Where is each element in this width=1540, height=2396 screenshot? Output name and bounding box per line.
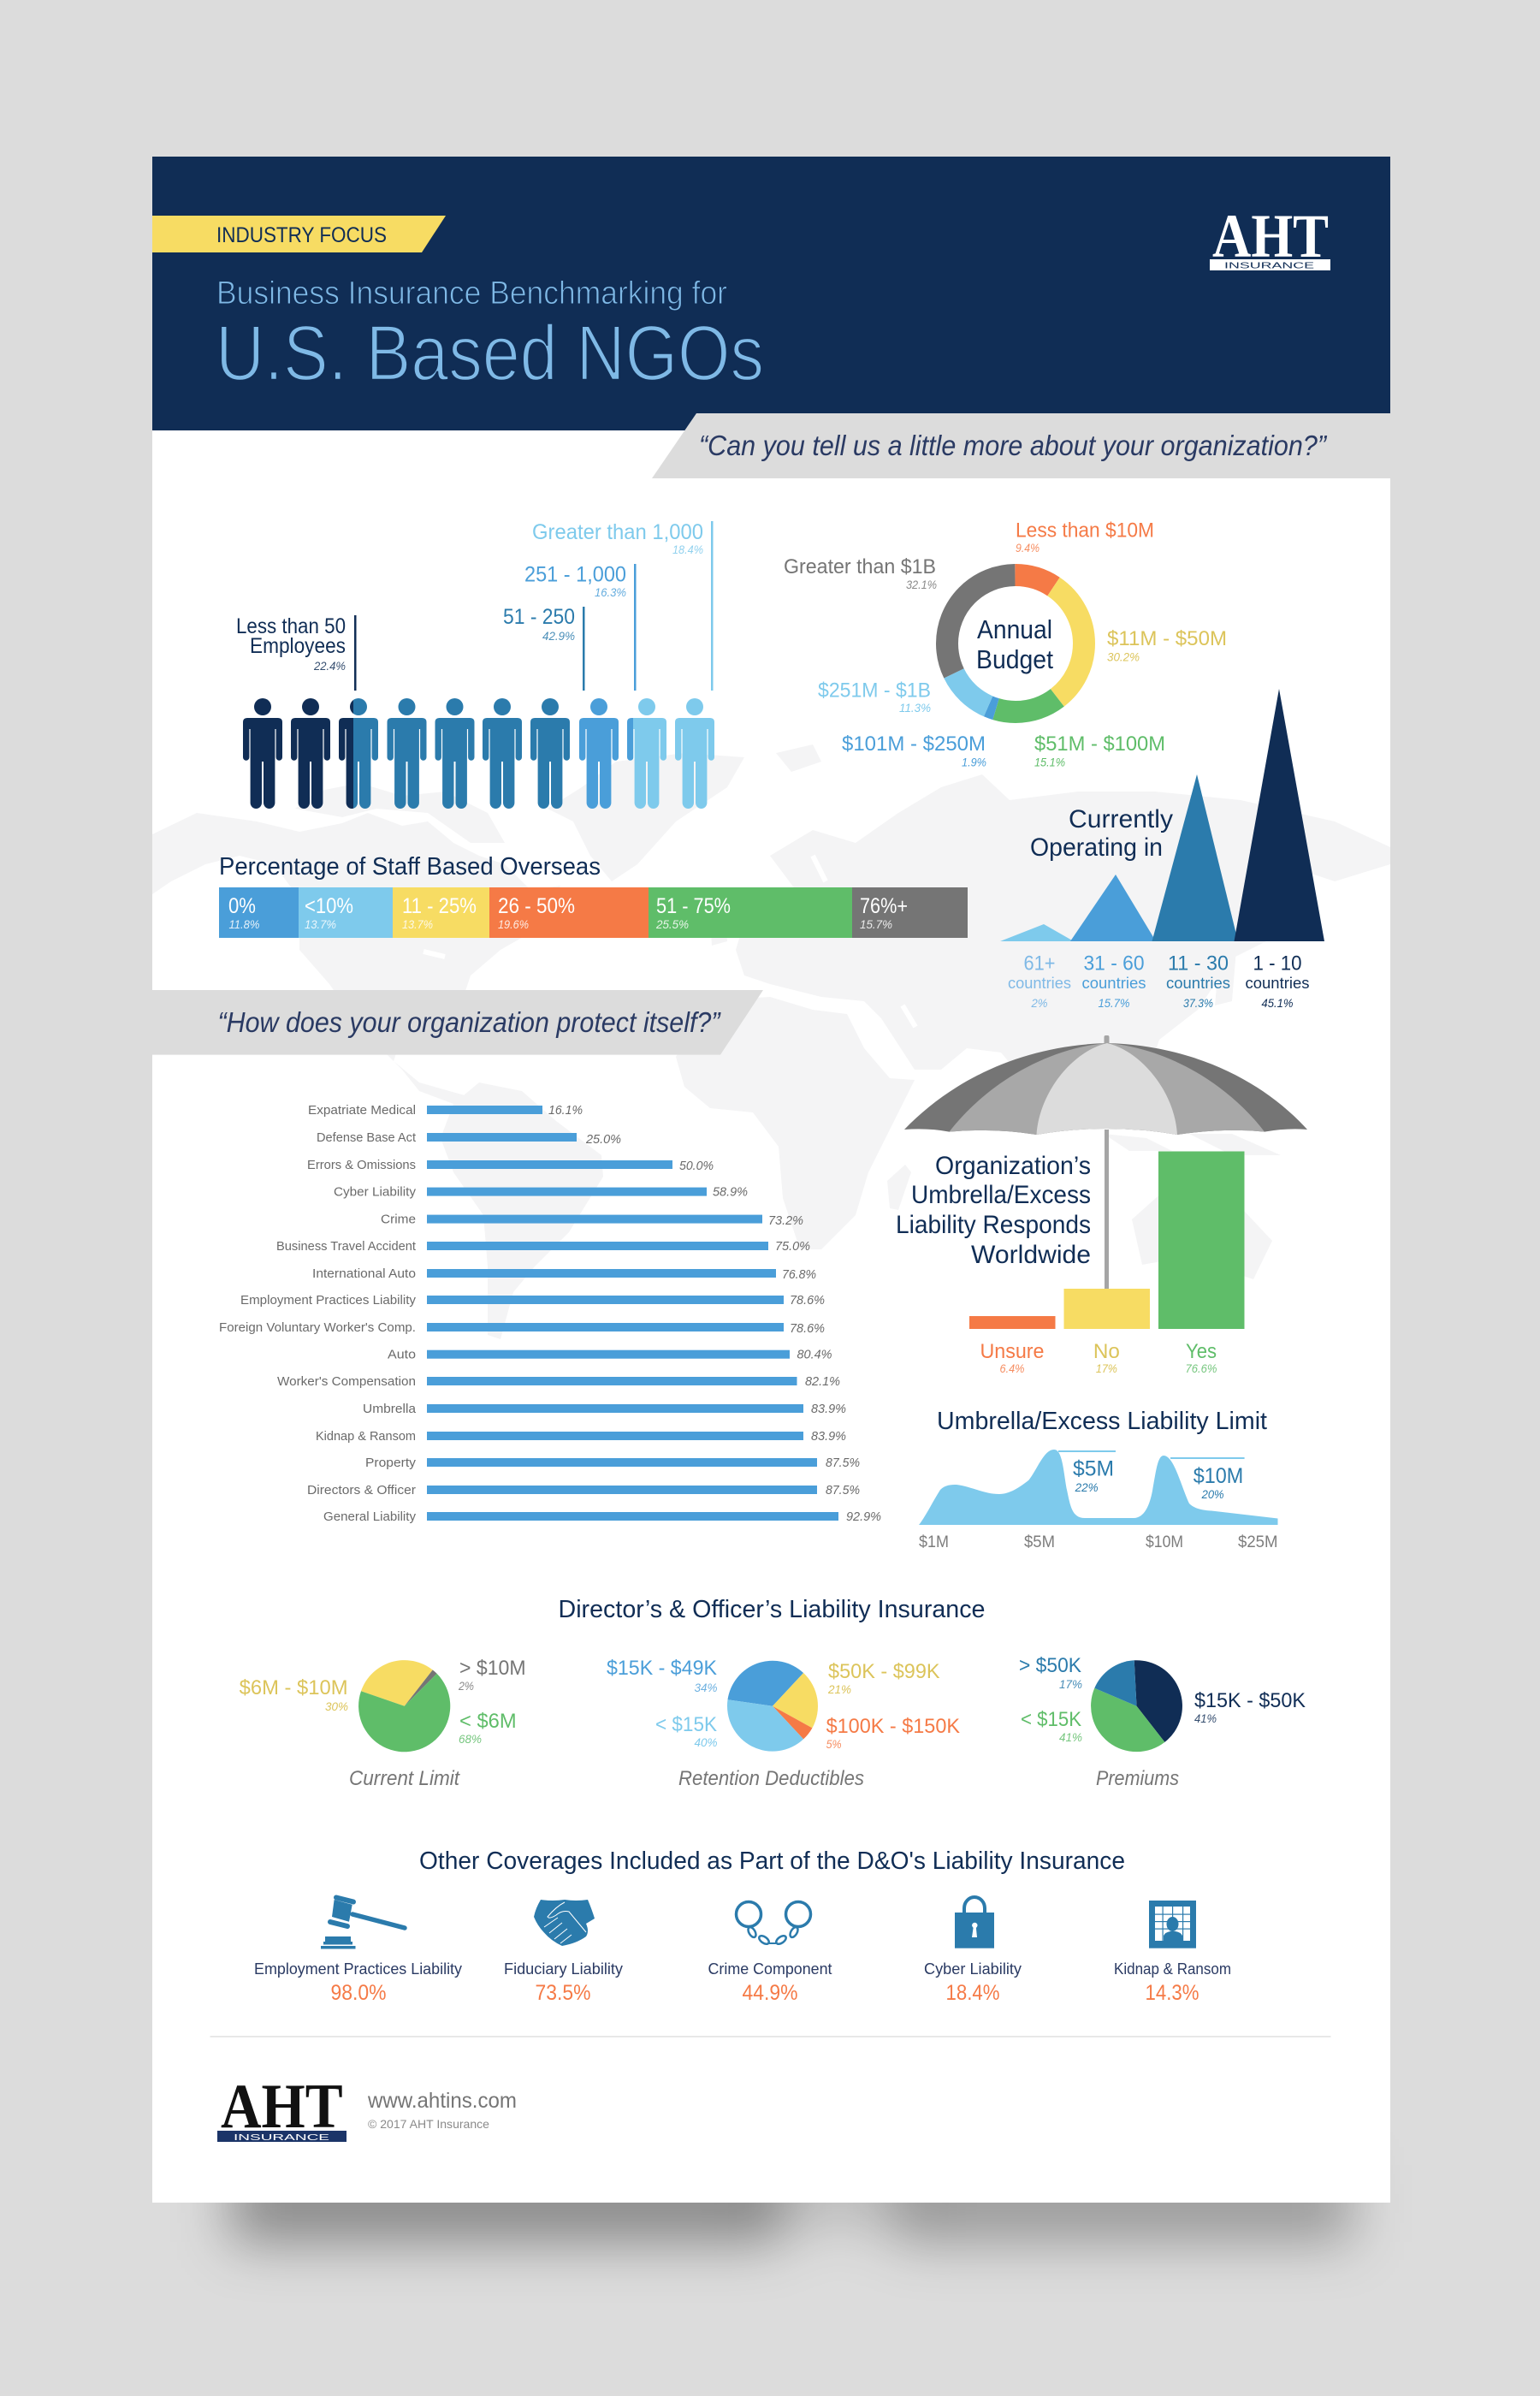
label: < $15K: < $15K: [1021, 1708, 1081, 1731]
logo: AHT footer: INSURANCE: [234, 2132, 329, 2143]
stacked bar: 15.7%: [860, 917, 892, 931]
label: yes: [1186, 1340, 1217, 1375]
label: 11-30 countries: 11 - 30: [1168, 952, 1229, 976]
icon: gavel: [321, 1898, 405, 1949]
caption: premiums: Premiums: [1096, 1767, 1179, 1790]
callout: $10M: 20%: [1201, 1488, 1224, 1501]
label: < $15K: < $15K: [655, 1713, 717, 1736]
label: employment practices liability: 98.0%: [330, 1981, 387, 2005]
label: greater than 1,000: [532, 520, 714, 691]
label: 61+ countries: 2%: [1031, 996, 1047, 1010]
label: 11-30 countries: [1166, 952, 1230, 1010]
panel: umbrella worldwide response: [896, 1035, 1307, 1375]
caption: current limit: Current Limit: [349, 1767, 460, 1790]
stacked bar: 13.7%: [305, 917, 336, 931]
label: $11M - $50M: $11M - $50M: [1107, 627, 1227, 650]
stacked bar: 26 - 50%: [498, 894, 575, 918]
stacked bar: 13.7%: [402, 917, 433, 931]
label: $51M - $100M: [1034, 732, 1165, 768]
label: crime component: 44.9%: [743, 1981, 797, 2005]
bar values: 78.6%: [790, 1322, 825, 1336]
header band: [152, 157, 1390, 430]
triangle chart: [1000, 689, 1324, 941]
label: 1-10 countries: countries: [1246, 975, 1309, 992]
area chart: [919, 1450, 1278, 1525]
label: 31-60 countries: [1081, 952, 1146, 1010]
label: < $15K: [1021, 1708, 1082, 1744]
bar labels: Cyber Liability: [334, 1186, 417, 1200]
pie: premiums: [1091, 1660, 1182, 1752]
label: 1-10 countries: 1 - 10: [1253, 952, 1302, 976]
label: $251M - $1B: [818, 679, 931, 715]
bar values: [548, 1104, 881, 1524]
bar labels: Umbrella: [363, 1403, 417, 1416]
bar labels: Auto: [388, 1349, 416, 1362]
bar values: 87.5%: [826, 1456, 860, 1470]
label: greater than 1,000: 18.4%: [672, 543, 703, 556]
label: $6M - $10M: [240, 1676, 348, 1713]
bar values: 76.8%: [782, 1268, 816, 1282]
bar labels: Foreign Voluntary Worker's Comp.: [219, 1321, 416, 1335]
label: greater than $1B: 32.1%: [906, 578, 937, 591]
label: greater than 1,000: Greater than 1,000: [532, 520, 703, 544]
bar values: 87.5%: [826, 1484, 860, 1498]
donut chart: [947, 575, 1084, 712]
heading: Organization’s: [935, 1152, 1091, 1180]
label: 11-30 countries: 37.3%: [1183, 996, 1213, 1010]
donut centre label: [976, 614, 1053, 674]
label: > $10M: [458, 1657, 526, 1693]
heading: [1030, 805, 1173, 862]
label: $15K - $49K: [607, 1657, 717, 1694]
bar labels: [219, 1104, 417, 1524]
panel: directors and officers liability insurance: [240, 1596, 1306, 1790]
industry focus tag: INDUSTRY FOCUS: [216, 223, 387, 247]
label: 1-10 countries: 45.1%: [1261, 996, 1294, 1010]
label: greater than $1B: Greater than $1B: [784, 555, 936, 578]
label: $6M - $10M: $6M - $10M: [240, 1676, 348, 1699]
bar labels: Worker's Compensation: [277, 1375, 416, 1389]
footer website: www.ahtins.com: [367, 2089, 517, 2113]
bar labels: Expatriate Medical: [308, 1104, 416, 1118]
label: fiduciary liability: [504, 1960, 623, 2005]
label: 31-60 countries: 15.7%: [1099, 996, 1129, 1010]
heading: Liability Responds: [896, 1211, 1091, 1239]
panel: umbrella excess liability limit: [919, 1408, 1278, 1551]
world map background: [152, 744, 1390, 1339]
logo: AHT footer: AHT: [221, 2072, 343, 2142]
label: > $10M: > $10M: [459, 1657, 526, 1680]
label: $100K - $150K: [826, 1715, 960, 1751]
label: employment practices liability: [254, 1960, 462, 2005]
label: < $15K: 41%: [1059, 1731, 1082, 1744]
label: $6M - $10M: 30%: [325, 1700, 348, 1713]
panel: employee count pictogram: [236, 520, 714, 809]
label: cyber liability: [924, 1960, 1022, 2005]
bar values: 50.0%: [679, 1159, 714, 1173]
panel: currently operating in: [1000, 689, 1324, 1010]
logo: AHT header: INSURANCE: [1224, 260, 1314, 270]
bar values: 73.2%: [768, 1214, 803, 1228]
bar labels: Directors & Officer: [307, 1484, 416, 1498]
axis labels: $25M: [1238, 1533, 1278, 1551]
label: no: [1093, 1340, 1120, 1375]
label: $51M - $100M: 15.1%: [1034, 755, 1065, 768]
stacked bar: 25.5%: [655, 917, 689, 931]
label: fiduciary liability: 73.5%: [536, 1981, 590, 2005]
donut centre label: Annual: [977, 614, 1052, 644]
label: no: No: [1093, 1340, 1120, 1363]
heading: Percentage of Staff Based Overseas: [219, 853, 601, 881]
label: less than $10M: Less than $10M: [1016, 519, 1154, 543]
stacked bar: [219, 887, 968, 938]
stacked bar: 0%: [228, 894, 256, 918]
label: kidnap and ransom: Kidnap & Ransom: [1114, 1960, 1231, 1978]
bar values: 75.0%: [775, 1240, 810, 1254]
subtitle: Business Insurance Benchmarking for: [216, 276, 727, 311]
icon: captive behind bars: [1149, 1901, 1196, 1948]
bar labels: Business Travel Accident: [276, 1240, 416, 1254]
ribbon: protection question: [152, 990, 763, 1055]
bar labels: Property: [365, 1456, 417, 1470]
axis labels: $5M: [1024, 1533, 1055, 1551]
label: 251 - 1,000: 251 - 1,000: [524, 563, 626, 587]
callout: $5M: 22%: [1075, 1481, 1099, 1494]
stacked bar: 11 - 25%: [402, 894, 477, 918]
label: less than $10M: 9.4%: [1016, 541, 1040, 555]
label: 31-60 countries: 31 - 60: [1083, 952, 1145, 976]
bar values: 83.9%: [811, 1403, 846, 1416]
label: < $6M: [459, 1710, 517, 1746]
label: > $50K: [1019, 1654, 1082, 1691]
label: crime component: [708, 1960, 832, 2005]
paper drop shadow: [231, 2165, 1352, 2242]
label: $251M - $1B: 11.3%: [899, 701, 931, 715]
heading: Umbrella/Excess Liability Limit: [937, 1408, 1267, 1435]
label: cyber liability: 18.4%: [946, 1981, 999, 2005]
label: greater than $1B: [784, 555, 937, 591]
bar labels: Kidnap & Ransom: [316, 1430, 416, 1444]
label: > $50K: 17%: [1059, 1678, 1082, 1691]
label: cyber liability: Cyber Liability: [924, 1960, 1022, 1978]
label: < $6M: < $6M: [459, 1710, 517, 1733]
bar values: 78.6%: [790, 1294, 825, 1308]
axis labels: $1M: [919, 1533, 949, 1551]
logo: AHT header: AHT: [1212, 202, 1329, 270]
bar labels: Employment Practices Liability: [240, 1294, 417, 1308]
bar labels: Defense Base Act: [317, 1131, 416, 1145]
donut centre label: Budget: [976, 644, 1053, 674]
label: 31-60 countries: countries: [1081, 975, 1146, 992]
pie: current limit: [358, 1660, 450, 1752]
heading: Currently: [1069, 805, 1173, 833]
callout: $10M: $10M: [1194, 1464, 1243, 1488]
label: $101M - $250M: 1.9%: [962, 755, 986, 768]
label: $251M - $1B: $251M - $1B: [818, 679, 931, 702]
icon: row of ten people: [243, 698, 714, 809]
heading: [896, 1152, 1091, 1269]
label: 51 - 250: 51 - 250: [503, 605, 575, 629]
stacked bar: 76%+: [860, 894, 908, 918]
label: less than 50 employees: 22.4%: [313, 659, 346, 673]
label: $50K - $99K: [827, 1660, 940, 1696]
label: unsure: Unsure: [980, 1340, 1044, 1363]
label: > $50K: > $50K: [1019, 1654, 1081, 1677]
bar chart: coverage types: [219, 1104, 881, 1524]
bar chart: responds worldwide: [969, 1152, 1244, 1329]
bar values: 82.1%: [805, 1375, 840, 1389]
label: > $10M: 2%: [458, 1680, 474, 1693]
stacked bar: 19.6%: [498, 917, 529, 931]
title: U.S. Based NGOs: [216, 310, 764, 397]
panel: percentage of staff overseas: [219, 853, 968, 938]
label: 61+ countries: countries: [1008, 975, 1071, 992]
axis labels: [919, 1533, 1278, 1551]
label: $50K - $99K: $50K - $99K: [828, 1660, 940, 1683]
label: < $15K: 40%: [695, 1736, 717, 1749]
paper sheet: [152, 157, 1390, 2203]
label: $51M - $100M: $51M - $100M: [1034, 732, 1165, 756]
heading: Director’s & Officer’s Liability Insurance: [558, 1596, 986, 1623]
label: no: 17%: [1096, 1362, 1117, 1375]
panel: annual budget donut: [784, 519, 1227, 768]
label: unsure: 6.4%: [999, 1362, 1025, 1375]
callout: $10M: [1170, 1457, 1245, 1501]
bar labels: General Liability: [323, 1510, 417, 1524]
callout: $5M: [1058, 1450, 1116, 1494]
footer copyright: © 2017 AHT Insurance: [368, 2117, 489, 2131]
bar values: 25.0%: [585, 1133, 621, 1147]
icon: handcuffs: [736, 1901, 811, 1946]
heading: Umbrella/Excess: [911, 1181, 1091, 1209]
heading: Other Coverages Included as Part of the D&O's Liability Insurance: [419, 1847, 1125, 1875]
pie: retention deductibles: [727, 1661, 818, 1752]
label: $15K - $50K: $15K - $50K: [1194, 1689, 1306, 1712]
icon: handshake: [534, 1900, 595, 1946]
label: less than $10M: [1016, 519, 1154, 555]
label: crime component: Crime Component: [708, 1960, 832, 1978]
label: 251 - 1,000: [524, 563, 637, 691]
label: $101M - $250M: [842, 732, 986, 768]
bar labels: International Auto: [312, 1267, 416, 1281]
label: kidnap and ransom: 14.3%: [1145, 1981, 1199, 2005]
bar labels: Errors & Omissions: [307, 1159, 416, 1172]
icon: padlock: [955, 1897, 994, 1948]
label: $101M - $250M: $101M - $250M: [842, 732, 986, 756]
label: 61+ countries: [1008, 952, 1071, 1010]
label: less than 50 employees: Employees: [250, 634, 346, 658]
label: less than 50 employees: [236, 614, 356, 691]
panel: other coverages: [254, 1847, 1231, 2005]
label: 51 - 250: [503, 605, 585, 691]
stacked bar: <10%: [305, 894, 353, 918]
label: 11-30 countries: countries: [1166, 975, 1230, 992]
label: employment practices liability: Employment Practices Liability: [254, 1960, 462, 1978]
label: yes: Yes: [1186, 1340, 1217, 1363]
label: $15K - $49K: 34%: [695, 1681, 717, 1694]
label: $11M - $50M: 30.2%: [1107, 650, 1140, 664]
label: $15K - $50K: [1194, 1689, 1306, 1725]
industry focus tag: [152, 216, 446, 252]
caption: retention deductibles: Retention Deductibles: [678, 1767, 864, 1790]
bar values: 58.9%: [713, 1186, 748, 1200]
label: < $6M: 68%: [459, 1733, 482, 1746]
stacked bar: 51 - 75%: [656, 894, 731, 918]
label: $100K - $150K: 5%: [826, 1738, 842, 1751]
axis labels: $10M: [1146, 1533, 1183, 1551]
label: fiduciary liability: Fiduciary Liability: [504, 1960, 623, 1978]
bar labels: Crime: [381, 1213, 416, 1227]
label: 61+ countries: 61+: [1023, 952, 1056, 976]
icon: umbrella: [904, 1035, 1307, 1290]
label: $100K - $150K: $100K - $150K: [826, 1715, 960, 1738]
ribbon: protection question: “How does your organization protect itself?”: [217, 1006, 721, 1038]
bar values: 83.9%: [811, 1430, 846, 1444]
callout: $5M: $5M: [1073, 1457, 1114, 1481]
stacked bar: 11.8%: [229, 917, 260, 931]
bar values: 16.1%: [548, 1104, 583, 1118]
label: kidnap and ransom: [1114, 1960, 1231, 2005]
label: yes: 76.6%: [1186, 1362, 1217, 1375]
label: less than 50 employees: Less than 50: [236, 614, 346, 638]
label: $11M - $50M: [1107, 627, 1227, 664]
bars: [427, 1106, 838, 1521]
bar values: 80.4%: [797, 1349, 832, 1362]
label: $15K - $50K: 41%: [1194, 1712, 1217, 1725]
label: $50K - $99K: 21%: [827, 1683, 851, 1696]
ribbon: organization question: “Can you tell us a little more about your organization?”: [699, 430, 1328, 461]
bar values: 92.9%: [846, 1510, 881, 1524]
label: unsure: [980, 1340, 1044, 1375]
label: 51 - 250: 42.9%: [542, 629, 575, 643]
ribbon: organization question: [652, 413, 1390, 478]
label: $15K - $49K: $15K - $49K: [607, 1657, 717, 1680]
heading: Worldwide: [971, 1241, 1091, 1269]
label: 251 - 1,000: 16.3%: [595, 585, 626, 599]
heading: Operating in: [1030, 833, 1163, 862]
label: < $15K: [655, 1713, 717, 1749]
label: 1-10 countries: [1246, 952, 1309, 1010]
